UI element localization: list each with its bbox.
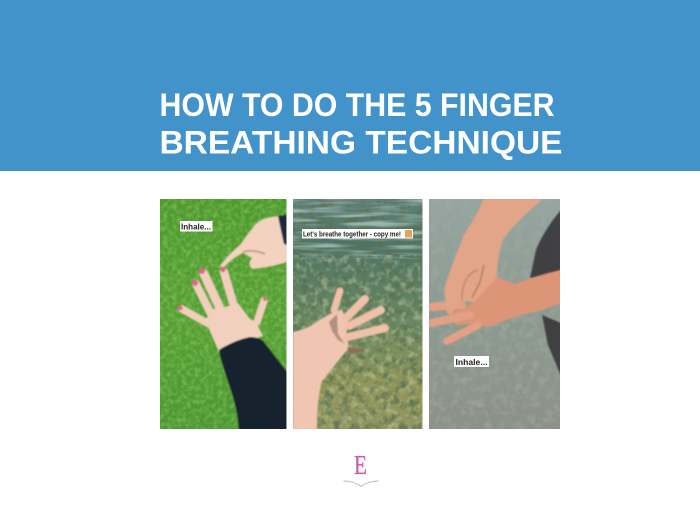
pointing hand	[220, 215, 287, 269]
label: copy me: Let's breathe together - copy me!	[303, 232, 401, 238]
panel: photo of hand above water	[293, 199, 422, 430]
header band	[0, 0, 700, 171]
logo	[344, 450, 378, 486]
panel: photo of hand on grass	[160, 199, 287, 430]
black sleeve	[219, 337, 287, 430]
open hand with painted nails	[178, 267, 267, 352]
dark shorts	[530, 210, 561, 376]
panel: photo of hands above pebbles	[429, 199, 561, 429]
label: inhale: Inhale...	[456, 357, 488, 367]
title: BREATHING TECHNIQUE	[160, 124, 562, 160]
title: HOW TO DO THE 5 FINGER	[160, 87, 554, 123]
label: inhale: Inhale...	[181, 222, 211, 231]
title	[160, 87, 562, 160]
logo: E	[354, 450, 367, 480]
breathing hand	[293, 291, 385, 430]
upper hand and arm	[444, 199, 543, 315]
lower hand and arm	[431, 270, 561, 341]
